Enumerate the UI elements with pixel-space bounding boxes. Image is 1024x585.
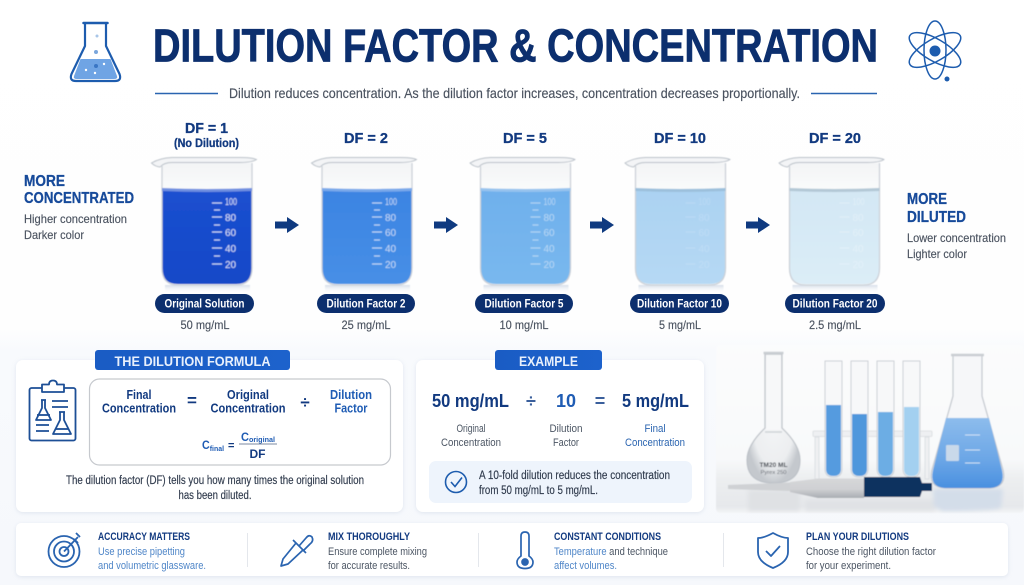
volumetric flask <box>747 353 800 483</box>
beaker column: DF 2 <box>312 130 416 332</box>
formula box: Concentration <box>102 400 176 416</box>
beaker: medium blue: 80 <box>385 213 397 224</box>
equation labels: Concentration <box>625 437 685 449</box>
equation <box>432 391 689 411</box>
beaker: darkest blue: 40 <box>225 244 237 255</box>
equation: 10 <box>556 391 576 411</box>
tip: accuracy matters <box>48 531 206 572</box>
tip: plan your dilutions: Choose the right dilution factor <box>806 546 936 558</box>
test tubes <box>825 361 920 477</box>
heading: DF = 2: DF = 2 <box>344 130 388 147</box>
arrow <box>746 217 770 233</box>
tube rack <box>813 431 932 479</box>
beaker: palest blue: 40 <box>852 244 864 255</box>
tip: constant conditions <box>517 531 668 572</box>
label pill <box>630 294 729 313</box>
tip: mix thoroughly: for accurate results. <box>328 560 410 572</box>
callout: from 50 mg/mL to 5 mg/mL. <box>479 485 598 497</box>
heading: DF = 10: DF = 10 <box>654 130 706 147</box>
label: more concentrated: Higher concentration <box>24 212 127 226</box>
heading tag: EXAMPLE <box>519 353 578 369</box>
beaker: light blue <box>470 158 575 293</box>
tip: mix thoroughly: Ensure complete mixing <box>328 546 427 558</box>
beaker: light blue: 40 <box>544 244 555 255</box>
tip: mix thoroughly: MIX THOROUGHLY <box>328 531 411 543</box>
label pill: Dilution Factor 20 <box>792 296 878 310</box>
tip: accuracy matters: Use precise pipetting <box>98 546 185 558</box>
explanation text: has been diluted. <box>178 490 252 502</box>
label pill <box>475 294 573 313</box>
tip: accuracy matters: ACCURACY MATTERS <box>98 531 190 543</box>
equation: 5 mg/mL <box>622 391 689 411</box>
beaker column: DF 1 <box>152 120 256 332</box>
icon: flask <box>71 23 120 81</box>
formula box: DF <box>250 447 266 461</box>
heading: DF = 1: DF = 1 <box>185 120 228 137</box>
beaker: pale blue: 60 <box>698 228 710 239</box>
icon: target <box>48 533 80 567</box>
formula box: Concentration <box>210 400 286 416</box>
formula box: ÷ <box>300 393 310 412</box>
concentration value: 5 mg/mL <box>659 318 701 332</box>
label pill: Dilution Factor 2 <box>326 296 406 310</box>
formula box: = <box>228 440 234 452</box>
beaker: darkest blue: 60 <box>225 228 237 239</box>
beaker: palest blue <box>779 158 884 293</box>
beaker: light blue: 80 <box>544 213 555 224</box>
beaker: pale blue: 40 <box>698 244 710 255</box>
label: more diluted <box>907 191 1006 261</box>
equation: 50 mg/mL <box>432 391 509 411</box>
beaker: medium blue: 100 <box>385 197 397 208</box>
equation labels: Final <box>644 423 666 435</box>
arrow <box>275 217 299 233</box>
equation labels: Concentration <box>441 437 501 449</box>
beaker: medium blue: 40 <box>385 244 397 255</box>
beaker column: DF 5 <box>470 130 575 332</box>
beaker: palest blue: 80 <box>852 213 864 224</box>
tip: constant conditions: Temperature and technique <box>554 546 668 558</box>
pipette <box>728 477 932 498</box>
formula box: Factor <box>334 400 368 416</box>
label pill <box>155 294 254 313</box>
label: more concentrated: MORE <box>24 173 65 190</box>
heading tag <box>495 350 602 370</box>
concentration value: 50 mg/mL <box>180 318 230 332</box>
volumetric flask: TM20 ML <box>760 463 788 469</box>
formula box: = <box>187 391 197 410</box>
equation labels: Factor <box>553 437 579 449</box>
icon: shield check <box>758 533 788 568</box>
equation labels: Original <box>456 423 486 435</box>
equation labels: Dilution <box>550 423 582 435</box>
label: more concentrated <box>24 173 134 242</box>
equation labels <box>441 423 685 449</box>
photo: laboratory glassware <box>716 345 1024 513</box>
formula box: Dilution <box>330 387 372 402</box>
volumetric flask: Pyrex 250 <box>760 470 787 476</box>
label pill <box>785 294 885 313</box>
tip: plan your dilutions <box>758 531 936 572</box>
formula box: Final <box>126 387 152 402</box>
beaker: pale blue: 80 <box>698 213 710 224</box>
icon: check circle <box>446 472 466 492</box>
beaker: light blue: 20 <box>544 260 555 271</box>
beaker: palest blue: 20 <box>852 260 864 271</box>
tip: plan your dilutions: for your experiment. <box>806 560 891 572</box>
beaker: darkest blue: 20 <box>225 260 237 271</box>
beaker: darkest blue: 80 <box>225 213 237 224</box>
reflections <box>748 489 1003 511</box>
label pill: Dilution Factor 5 <box>484 296 564 310</box>
formula box: final <box>210 444 224 453</box>
formula box: Original <box>227 387 269 402</box>
icon: atom <box>904 21 966 82</box>
tip: constant conditions: CONSTANT CONDITIONS <box>554 531 661 543</box>
formula box: C <box>241 432 249 444</box>
heading: DF = 1: (No Dilution) <box>174 136 239 150</box>
icon: dropper <box>281 536 313 566</box>
beaker column: DF 20 <box>779 130 885 332</box>
beaker column: DF 10 <box>625 130 730 332</box>
label pill: Dilution Factor 10 <box>637 296 722 310</box>
concentration value: 2.5 mg/mL <box>809 318 861 332</box>
formula box: original <box>249 435 275 444</box>
formula box: C <box>202 440 210 452</box>
panel: dilution formula <box>16 350 403 512</box>
erlenmeyer flask <box>931 355 1004 488</box>
beaker: pale blue: 100 <box>698 197 711 208</box>
beaker: palest blue: 60 <box>852 228 864 239</box>
callout: A 10-fold dilution reduces the concentration <box>479 470 670 482</box>
label: more diluted: Lighter color <box>907 247 967 261</box>
heading: DF = 5: DF = 5 <box>503 130 547 147</box>
concentration value: 10 mg/mL <box>500 318 549 332</box>
beaker: pale blue <box>625 158 730 293</box>
label pill <box>317 294 415 313</box>
label: more concentrated: CONCENTRATED <box>24 190 134 207</box>
tip: accuracy matters: and volumetric glassware. <box>98 560 206 572</box>
heading: DF = 20: DF = 20 <box>809 130 861 147</box>
icon: thermometer <box>517 532 533 568</box>
label: more diluted: Lower concentration <box>907 231 1006 245</box>
label: more diluted: DILUTED <box>907 209 966 226</box>
tip: mix thoroughly <box>281 531 427 572</box>
explanation text <box>66 475 364 502</box>
label pill: Original Solution <box>164 296 244 310</box>
tip: plan your dilutions: PLAN YOUR DILUTIONS <box>806 531 909 543</box>
label: more diluted: MORE <box>907 191 947 208</box>
callout <box>429 461 692 503</box>
panel: tips bar <box>16 523 1008 576</box>
beaker: light blue: 100 <box>544 197 556 208</box>
beaker: medium blue <box>312 158 416 293</box>
title: DILUTION FACTOR & CONCENTRATION <box>153 20 878 72</box>
beaker: pale blue: 20 <box>698 260 710 271</box>
icon: clipboard <box>30 380 76 440</box>
tip: constant conditions: affect volumes. <box>554 560 617 572</box>
beaker: palest blue: 100 <box>852 197 865 208</box>
concentration value: 25 mg/mL <box>342 318 391 332</box>
explanation text: The dilution factor (DF) tells you how many times the original solution <box>66 475 364 487</box>
equation: = <box>595 391 605 411</box>
beaker: darkest blue: 100 <box>225 197 237 208</box>
arrow <box>590 217 614 233</box>
label: more concentrated: Darker color <box>24 228 84 242</box>
heading: DF = 1 <box>174 120 239 150</box>
equation: ÷ <box>526 391 536 411</box>
beaker: medium blue: 60 <box>385 228 397 239</box>
beaker: light blue: 60 <box>544 228 555 239</box>
subtitle: Dilution reduces concentration. As the dilution factor increases, concentration decreases proportionally. <box>229 85 800 101</box>
beaker: darkest blue <box>152 158 256 293</box>
heading tag: THE DILUTION FORMULA <box>114 353 270 369</box>
panel: example <box>416 350 704 512</box>
formula box <box>90 379 390 465</box>
beaker: medium blue: 20 <box>385 260 397 271</box>
arrow <box>434 217 458 233</box>
